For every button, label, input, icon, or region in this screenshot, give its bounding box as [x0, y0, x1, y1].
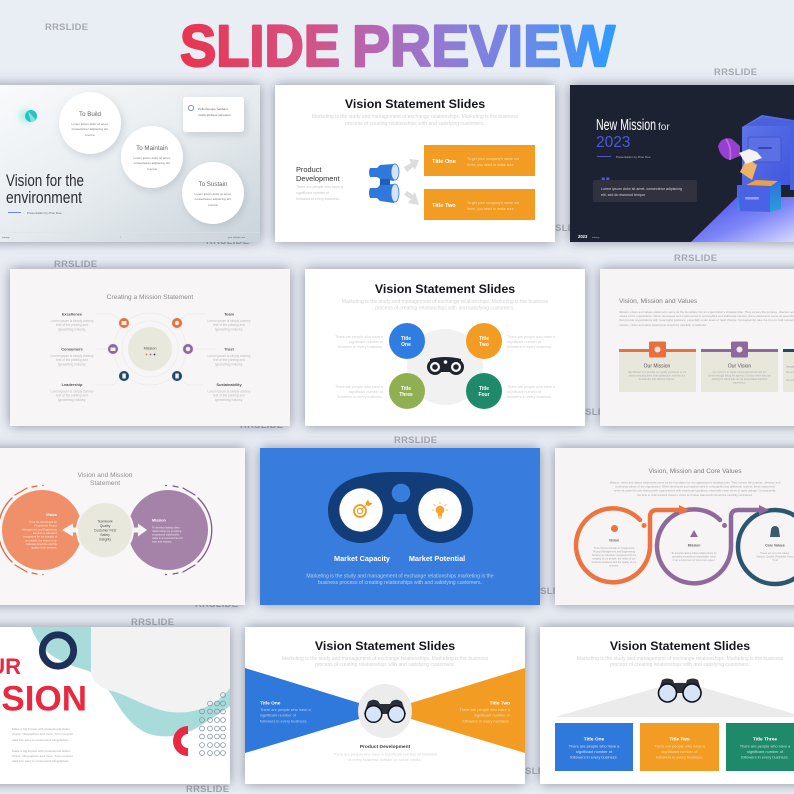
card: Our Mission: Our Mission [644, 364, 671, 370]
watermarks: RRSLIDE [206, 235, 249, 246]
box: Title One: There are people who have a [569, 744, 620, 748]
ring: Mission: providing exceptional stakeholder value [672, 556, 716, 558]
box: Title Two: There are people who have a [654, 744, 706, 748]
title: SLIDE [180, 14, 340, 79]
slide heading [596, 117, 670, 151]
dot grid [200, 693, 225, 755]
subtitle: Marketing is the study and management of exchange relationships. Marketing is the business [312, 114, 519, 120]
icon: blue binoculars [369, 164, 399, 203]
callout: Pellentesque habitant [198, 107, 228, 111]
card: Our Vision: experience. [733, 382, 746, 384]
hub diagram [96, 313, 216, 385]
circle: Vision: services in industries [33, 531, 58, 535]
circle: Title Four: Four [478, 392, 490, 398]
paragraph: Mission, vision and values statements serve as the foundation for an organization's strategic plan. They convey the purpose, direction and [619, 310, 794, 314]
circle: To Maintain: To Maintain [136, 145, 168, 152]
slide: Market Capacity and Market Potential [260, 448, 540, 605]
wedge: Title Two [411, 668, 525, 753]
paragraph: the time to craft relevant mission, vision and value statements should be carefully considered. [637, 493, 753, 497]
circle: To Sustain [182, 162, 244, 224]
paragraphs: charts, infographics and more. Turn complex [12, 732, 73, 736]
red half ring [177, 730, 188, 752]
circle: Vision: recognized for the integrity of [24, 534, 57, 538]
icon: quote: ” [600, 173, 611, 198]
side text: There are people who have a [335, 385, 384, 389]
ring: Core Values: Core Values [765, 544, 785, 548]
circle: Title One [389, 323, 425, 359]
box: Title One: Title One [584, 736, 605, 742]
footer: infoway [592, 237, 600, 239]
side text: significant number of [507, 340, 542, 344]
slide heading: Vision, Mission and Core Values [649, 468, 742, 475]
slide: Vision Statement, Product Development [275, 85, 555, 242]
circle: To Sustain: To Sustain [199, 181, 228, 188]
icon: teal orb [19, 109, 37, 123]
subtitle [312, 114, 519, 127]
circle: Title Two: Two [479, 342, 489, 348]
circle: Mission [128, 485, 212, 575]
text: Team [207, 312, 251, 332]
binoculars mask [328, 472, 473, 543]
presenter [8, 211, 62, 215]
text: Product Development: followers in every business. [296, 197, 340, 201]
footer: your website.com [228, 236, 245, 239]
circle: Vision: Vision [46, 513, 58, 517]
circle: Mission: To develop lasting client [152, 526, 180, 530]
box: Title One: To get your company's name out [467, 157, 519, 161]
slide heading: Vision, Mission and Values [619, 298, 698, 305]
text: Leadership [50, 382, 94, 402]
circle: core values: Quality [100, 524, 111, 528]
circle: Title Two: Title [479, 336, 489, 342]
box: Title Two: Title Two [432, 203, 456, 209]
watermarks: RRSLIDE [394, 434, 437, 445]
slide heading: Vision Statement Slides [375, 282, 515, 296]
subtitle [577, 656, 784, 668]
text: Leadership: Leadership [62, 382, 83, 387]
slide heading [78, 472, 133, 487]
ring: Vision: To be the benchmark for Progressive [594, 547, 635, 550]
slide: Vision, Mission and Core Values [555, 448, 794, 605]
box: Title Two: there, you need to make sure [467, 207, 514, 211]
text: Leadership: Lorem Ipsum is simply dummy [50, 390, 94, 394]
arrows [404, 159, 419, 205]
circle: To Build [59, 92, 121, 154]
box: Title Two [640, 723, 719, 771]
side text: significant number of [349, 340, 384, 344]
text: Sustainability: text of the printing and [213, 394, 245, 398]
text: Product Development: significant number of [296, 191, 329, 195]
subtitle: process of creating relationships with and satisfying customers. [610, 662, 750, 668]
circle: core values: Integrity [99, 538, 111, 542]
watermarks: RRSLIDE [714, 66, 757, 77]
labels [334, 554, 465, 563]
slide heading: Vision Statement Slides [610, 639, 750, 653]
subtitle: Marketing is the study and management of exchange relationships marketing is the [306, 574, 494, 580]
circle: core values [76, 501, 134, 559]
text: Leadership: typesetting industry. [58, 398, 86, 402]
text: Sustainability: typesetting industry. [215, 398, 243, 402]
text: Team: Team [224, 312, 234, 316]
text: Consumers: Consumers [61, 346, 83, 352]
watermarks: RRSLIDE [541, 222, 584, 233]
paragraphs: data into easy to understand infographics. [12, 738, 70, 742]
box: Title Two: To get your company's name out [467, 201, 519, 205]
circle: Title One: One [401, 342, 411, 348]
text: Excellence: typesetting industry. [58, 328, 86, 332]
text: Product Development: in every business domain on social media. [348, 757, 422, 762]
circle: Vision: To be the benchmark for [29, 520, 57, 524]
card: Our Mission: trustworthy and efficient manner. [639, 378, 675, 381]
presenter: Presentation by Jhon Doe [616, 155, 651, 159]
labels: Market Capacity [334, 554, 391, 563]
text: Sustainability: Sustainability [216, 382, 242, 387]
wedge: Title One [245, 668, 359, 753]
text: Trust: typesetting industry. [215, 362, 243, 366]
box: Title Two: Title Two [669, 736, 690, 742]
text: Consumers: Lorem Ipsum is simply dummy [50, 354, 94, 358]
subtitle: process of creating relationships with and satisfying customers. [375, 306, 515, 312]
wedge: Title One: There are people who have a [260, 707, 311, 712]
text: Excellence [50, 312, 94, 332]
text: Product Development: Product Development [360, 744, 411, 750]
circle: Vision: our people, the ethics of our [25, 538, 57, 542]
circle: core values: Safety [100, 533, 110, 537]
labels: Market Potential [409, 554, 465, 563]
text: Product Development [296, 165, 343, 201]
circle: Title One: Title [401, 336, 411, 342]
callout: morbi tristique senectus [198, 113, 231, 117]
circle: To Build: To Build [79, 111, 102, 118]
slide: Vision and Mission Statement [0, 448, 245, 605]
ring: Vision: Vision [609, 538, 619, 542]
slide heading: for [658, 122, 670, 133]
ring: Core Values: Trust [772, 559, 778, 562]
card: Our Vision: looking for talent that can be appreciated and their [712, 378, 767, 381]
subtitle [282, 656, 489, 668]
card: Our Vision: clients through being the agency of choice when they are [708, 374, 772, 378]
wedge: Title One: Title One [260, 700, 281, 706]
slide heading [0, 654, 87, 718]
ring: Core Values [738, 510, 794, 584]
wedge: Title Two: significant number of [474, 712, 511, 718]
circle: Mission: Mission [152, 518, 166, 522]
text: Consumers: typesetting industry. [58, 362, 86, 366]
ring: Vision: Services in industries recognized for the [592, 554, 637, 557]
slide: Vision Statement, two wedges [245, 627, 525, 784]
box: Title One [555, 723, 633, 771]
card: Our Mission: clients assuring them total satisfaction and that is a [629, 374, 686, 378]
paragraph [610, 480, 781, 497]
text: Product Development: Product [296, 165, 321, 174]
text: Product Development: Development [296, 174, 340, 183]
slide heading: Vision Statement Slides [315, 639, 455, 653]
ring: Vision: integrity of our people, the ethics of our [592, 558, 636, 560]
circle: Mission: relationships by providing [152, 529, 182, 533]
paragraph: serve as powerful tools that provide organizations with meaningful guidance, especially under times of rapid change. Consequently, [614, 488, 776, 492]
circle: Vision: Management and Engineering [22, 528, 58, 532]
watermarks: RRSLIDE [240, 419, 283, 430]
text: Excellence: Lorem Ipsum is simply dummy [50, 319, 94, 323]
paragraphs: charts, infographics and more. Turn complex [12, 754, 73, 758]
subtitle: business process of creating relationships with and satisfying customers. [318, 580, 482, 586]
circle: Vision [0, 485, 82, 575]
side text [335, 335, 556, 399]
text: Excellence: Excellence [62, 312, 83, 316]
ring: Mission [657, 505, 769, 583]
wedge: Title One: significant number of [260, 712, 297, 718]
backdrop circle [407, 329, 483, 405]
text: Product Development: There are people who have a [296, 185, 343, 189]
slide heading: Statement [90, 480, 120, 487]
teal blob lower [108, 680, 230, 736]
circle: Title Four [466, 373, 502, 409]
text: Team: text of the printing and [213, 323, 245, 327]
ring [42, 635, 74, 666]
side text: followers in every business. [507, 345, 552, 349]
paragraphs: data into easy to understand infographics. [12, 759, 70, 763]
presenter [597, 155, 651, 159]
side text: There are people who have a [335, 335, 384, 339]
circle: To Sustain: Inenna [208, 203, 218, 207]
slide heading: environment [6, 188, 82, 207]
paragraphs: Make a big impact with professional slides, [12, 749, 71, 753]
box: Title Two: followers in every business. [656, 754, 703, 760]
hub diagram: Mission [144, 346, 156, 350]
icon: 3D filing cabinet [718, 115, 794, 212]
slide heading [6, 171, 84, 207]
box: Title Three: There are people who have a [740, 744, 791, 748]
box: Title Two [424, 189, 535, 220]
text: Consumers [50, 346, 94, 366]
wedge: Title Two: There are people who have a [459, 707, 511, 712]
side text: followers in every business. [338, 345, 383, 349]
wedge: Title Two: Title Two [490, 700, 510, 706]
side text: followers in every business. [507, 395, 552, 399]
footer: infoway [2, 237, 10, 239]
paragraphs: Make a big impact with professional slides, [12, 727, 71, 731]
backdrop circle [358, 684, 412, 738]
arrows [62, 524, 147, 536]
card: Our Vision [701, 342, 778, 392]
slide heading: Vision for the [6, 171, 84, 190]
title [180, 14, 615, 79]
card: Our Mission: Our Mission is to provide top quality personnel to our [628, 371, 686, 374]
circle: Vision: business practices and the [26, 542, 58, 546]
box: Title Three: significant number of [747, 749, 784, 754]
text: Trust: Lorem Ipsum is simply dummy [207, 354, 251, 358]
subtitle: Marketing is the study and management of exchange relationships. Marketing is the business [282, 656, 489, 662]
circle: Mission: trust and respect. [152, 540, 172, 544]
slide: Our Vision [0, 627, 230, 784]
text: Team: typesetting industry. [215, 328, 243, 332]
footer [578, 234, 600, 239]
watermarks: RRSLIDE [674, 252, 717, 263]
paragraph [619, 310, 794, 327]
circle: Title Three: Title [401, 386, 411, 392]
paragraph: underlying values of the organization. When developed and implemented in a thoughtful and deliberate manner, these statements [615, 484, 776, 488]
watermarks: RRSLIDE [526, 585, 569, 596]
ring: Mission: in an environment of trust and respect. [673, 559, 716, 562]
paragraph: mission, vision and value statements should be carefully considered. [619, 323, 707, 327]
text: Product Development [333, 744, 437, 762]
slide heading: 2023 [596, 134, 630, 151]
box: Title Three [726, 723, 794, 771]
gray blob [91, 627, 230, 713]
callout: elit, sed do eiusmod tempor [601, 193, 646, 197]
side text: significant number of [349, 390, 384, 394]
callout: Lorem ipsum dolor sit amet, consectetur adipiscing [601, 187, 682, 191]
box: Title One [424, 145, 535, 176]
ring: Vision: business practices and the quality of our [592, 561, 636, 564]
side text: There are people who have a [507, 335, 556, 339]
circle: Vision: Progressive Project [34, 524, 57, 528]
slide heading: Vision Statement Slides [345, 97, 485, 111]
circle: core values: Teamwork [97, 520, 113, 524]
side text: There are people who have a [507, 385, 556, 389]
box: Title Three: followers in every business. [741, 754, 789, 760]
circle: To Build: consectetuer adipiscing elit. [72, 127, 109, 131]
wedge: Title Two: followers in every business. [462, 718, 510, 724]
icon: binoculars [364, 700, 406, 722]
subtitle: Marketing is the study and management of exchange relationships. Marketing is the business [577, 656, 784, 662]
card: Our Values [783, 349, 794, 392]
slide: Vision, Mission and Values [600, 269, 794, 426]
card: Our Mission [619, 342, 696, 392]
circle: To Maintain: consectetuer adipiscing elit. [134, 161, 171, 165]
side text: significant number of [507, 390, 542, 394]
circle: Vision: quality of our services. [31, 546, 57, 550]
slide: Vision for the environment [0, 85, 260, 242]
subtitle: process of creating relationships with and satisfying customers. [315, 662, 455, 668]
slide heading: Creating a Mission Statement [107, 294, 193, 301]
text: Product Development: There are people who have a significant number of followers [333, 752, 437, 756]
box: Title One: followers in every business. [570, 754, 618, 760]
circle: Title Two [466, 323, 502, 359]
slide: New Mission for 2023 [570, 85, 794, 242]
circle: To Maintain: Inenna [147, 167, 157, 171]
text: Sustainability: Lorem Ipsum is simply dummy [207, 390, 251, 394]
text: Leadership: text of the printing and [56, 394, 88, 398]
presenter: Presentation by Jhon Doe [27, 211, 62, 215]
icon: binoculars [427, 357, 464, 375]
watermarks: RRSLIDE [131, 616, 174, 627]
watermarks: RRSLIDE [195, 598, 238, 609]
box: Title One: there, you need to make sure [467, 163, 514, 167]
wedge: Title One: followers in every business. [260, 718, 308, 724]
circle: To Maintain [121, 126, 183, 188]
circle: Title Four: Title [479, 386, 489, 392]
text: Trust [207, 346, 251, 366]
callout [593, 180, 697, 202]
card: Our Vision: Our vision is to create meaningful bonds with our [712, 371, 767, 374]
ring: Core Values: These are our core values: [760, 552, 790, 555]
box: Title One: significant number of [576, 749, 613, 754]
card: Our Vision: Our Vision [728, 364, 751, 370]
circle: Mission: exceptional stakeholder [152, 532, 179, 536]
icon: binoculars [658, 678, 702, 702]
slide: Vision Statement, four titles [305, 269, 585, 426]
text: Excellence: text of the printing and [56, 323, 88, 327]
ring: Vision: Project Management and Engineering [593, 550, 636, 554]
paragraph: that provide organizations with meaningful guidance, especially under times of rapid change. Consequently, take the time to craft relevant [619, 318, 794, 322]
circle: Mission: value in an environment of [152, 536, 183, 540]
watermarks: RRSLIDE [45, 21, 88, 32]
gray triangle [555, 681, 794, 717]
slide heading: Vision and Mission [78, 472, 133, 479]
circle: To Build: Lorem ipsum dolor sit amet, [71, 122, 109, 126]
circle: Title Three [389, 373, 425, 409]
box: Title Two: significant number of [662, 749, 698, 754]
watermarks: RRSLIDE [54, 258, 97, 269]
ring: Vision: services. [609, 564, 619, 568]
box: Title Three: Title Three [753, 736, 777, 742]
side text: followers in every business. [338, 395, 383, 399]
watermarks: RRSLIDE [186, 783, 229, 794]
text: Team: Lorem Ipsum is simply dummy [207, 319, 251, 323]
slide: Vision Statement, three titles [540, 627, 794, 784]
circle: Title Three: Three [399, 392, 413, 398]
teal blob upper [31, 627, 91, 672]
slide: Creating a Mission Statement [10, 269, 290, 426]
slide heading: New Mission [596, 117, 656, 134]
circle: To Maintain: Lorem ipsum dolor sit amet, [133, 156, 171, 160]
circle: To Sustain: Lorem ipsum dolor sit amet, [194, 192, 232, 196]
paragraphs [12, 727, 73, 763]
footer: 2023 [578, 234, 588, 239]
ring: Mission: To develop lasting Client relationships by [671, 552, 717, 555]
icon: target [339, 488, 383, 532]
text: Sustainability [207, 382, 251, 402]
node icons [108, 318, 194, 382]
subtitle [342, 299, 549, 312]
footer: 1 [120, 237, 122, 239]
box: Title One: Title One [432, 159, 456, 165]
paragraph: Mission, vision and values statements serve as the foundation for an organization's strategic plan. They convey the purpose, direction and [610, 480, 781, 484]
watermarks: RRSLIDE [511, 765, 554, 776]
ring: Mission: Mission [688, 544, 700, 548]
icon: light bulb [418, 488, 462, 532]
ring: Vision [576, 505, 689, 582]
text: Trust: Trust [224, 346, 234, 352]
circle: To Build: Inenna [85, 133, 95, 137]
footer [0, 232, 260, 239]
text: Trust: text of the printing and [213, 358, 245, 362]
watermarks: RRSLIDE [571, 406, 614, 417]
title: PREVIEW [352, 14, 615, 79]
text: Consumers: text of the printing and [56, 358, 88, 362]
card: Our Values: We are [786, 371, 794, 374]
subtitle: process of creating relationships with and satisfying customers. [345, 121, 485, 127]
circle: core values: Customer First [94, 528, 116, 532]
subtitle [306, 574, 494, 586]
callout [183, 97, 244, 132]
gradient floor [691, 197, 794, 242]
circle: To Sustain: consectetuer adipiscing elit. [195, 197, 232, 201]
subtitle: Marketing is the study and management of exchange relationships. Marketing is the business [342, 299, 549, 305]
ring: Core Values: Integrity, Quality, Reliability, Team, [756, 556, 794, 558]
